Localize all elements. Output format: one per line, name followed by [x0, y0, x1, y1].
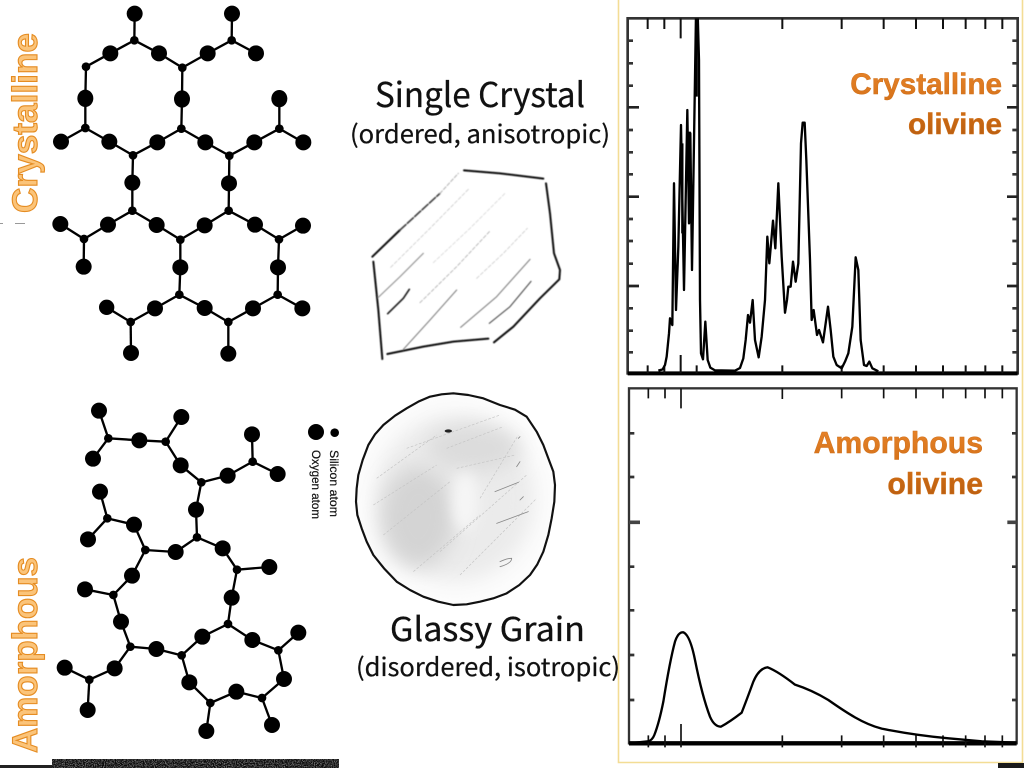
legend: silicon and oxygen atoms: Silicon atom [327, 450, 341, 517]
label: Crystalline olivine: Crystalline [850, 68, 1002, 101]
diagram: crystalline silica network [52, 6, 311, 362]
vertical heading: Crystalline: Crystalline [6, 33, 45, 213]
label: Crystalline olivine: olivine [908, 108, 1002, 141]
noisy dark strip at bottom left [0, 759, 339, 768]
sketch: glassy grain [353, 392, 560, 608]
legend: silicon and oxygen atoms: Oxygen atom [309, 450, 323, 519]
dark corner fragment at bottom right [998, 763, 1024, 768]
stray marks beside crystalline heading [0, 222, 25, 224]
heading: Glassy Grain: Glassy Grain [390, 603, 585, 651]
sketch: single crystal grain [372, 170, 560, 359]
heading: Single Crystal: Single Crystal [375, 68, 585, 117]
chart: amorphous olivine spectrum [629, 388, 1017, 747]
diagram: amorphous silica network [57, 403, 306, 739]
vertical heading: Amorphous: Amorphous [6, 557, 45, 753]
chart: crystalline olivine spectrum [628, 13, 1018, 373]
caption: ordered, anisotropic: (ordered, anisotropic) [350, 115, 610, 151]
panel frame: yellow border around charts [618, 0, 1022, 762]
label: Amorphous olivine: olivine [887, 468, 983, 501]
legend: silicon and oxygen atoms [308, 424, 341, 519]
caption: disordered, isotropic: (disordered, isotropic) [356, 648, 620, 684]
label: Amorphous olivine: Amorphous [814, 427, 983, 460]
